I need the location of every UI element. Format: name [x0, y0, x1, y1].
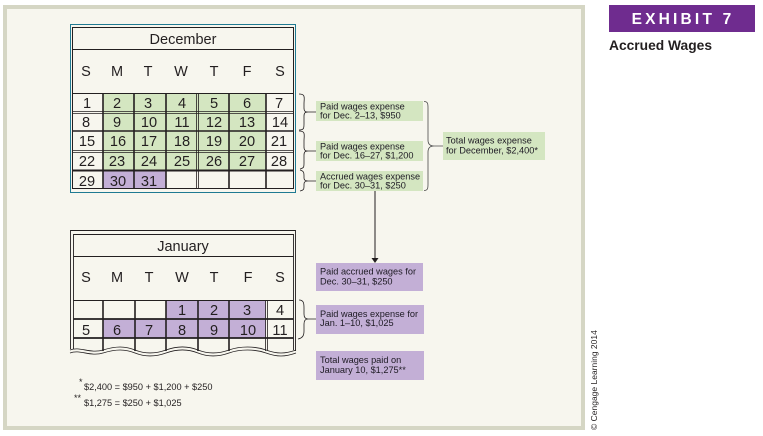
December dates: 7 — [275, 96, 283, 112]
December weekdays: S — [275, 64, 285, 80]
label: paid wages Jan 1-10 — [316, 305, 424, 334]
December dates: 10 — [141, 115, 157, 131]
December dates: 4 — [178, 96, 186, 112]
December dates: 16 — [110, 134, 126, 150]
December weekdays: S — [81, 64, 91, 80]
December title: December — [150, 32, 217, 48]
January dates: 10 — [240, 323, 256, 339]
December weekdays: W — [174, 64, 188, 80]
footnotes: $1,275 = $250 + $1,025 — [84, 398, 182, 408]
January dates: 7 — [145, 323, 153, 339]
exhibit banner: EXHIBIT 7 — [632, 11, 734, 28]
label: paid wages Dec 2-13: for Dec. 2–13, $950 — [320, 110, 401, 120]
January dates: 3 — [243, 303, 251, 319]
December dates — [79, 96, 288, 190]
December dates: 2 — [113, 96, 121, 112]
January highlighted days — [103, 300, 266, 338]
label: total wages paid: Total wages paid on — [320, 355, 401, 365]
December dates: 26 — [206, 154, 222, 170]
January weekdays — [81, 270, 285, 286]
arrow — [372, 191, 378, 263]
December weekdays: T — [144, 64, 153, 80]
December highlighted days — [103, 93, 266, 189]
label: paid accrued wages: Dec. 30–31, $250 — [320, 276, 393, 286]
December dates: 5 — [210, 96, 218, 112]
December weekdays: M — [111, 64, 123, 80]
label: paid wages Jan 1-10: Jan. 1–10, $1,025 — [320, 318, 394, 328]
January calendar — [70, 230, 296, 356]
label: paid accrued wages — [316, 263, 423, 291]
subtitle: Accrued Wages — [609, 38, 712, 53]
December weekdays: T — [210, 64, 219, 80]
label: total wages paid — [316, 351, 424, 380]
December weekdays — [81, 64, 285, 80]
December grid — [72, 28, 294, 188]
December dates: 20 — [239, 134, 255, 150]
December dates: 19 — [206, 134, 222, 150]
January grid — [70, 230, 296, 356]
December dates: 17 — [141, 134, 157, 150]
copyright: © Cengage Learning 2014 — [589, 330, 599, 430]
December dates: 21 — [271, 134, 287, 150]
December dates: 12 — [206, 115, 222, 131]
December dates: 31 — [141, 174, 157, 190]
January dates: 6 — [113, 323, 121, 339]
January dates: 8 — [178, 323, 186, 339]
footnotes: * — [79, 377, 83, 387]
January weekdays: F — [244, 270, 253, 286]
January dates: 11 — [272, 323, 288, 339]
December dates: 24 — [141, 154, 157, 170]
December dates: 25 — [174, 154, 190, 170]
January weekdays: T — [210, 270, 219, 286]
exhibit banner — [609, 5, 755, 32]
December dates: 28 — [271, 154, 287, 170]
December weekdays: F — [243, 64, 252, 80]
January dates: 1 — [178, 303, 186, 319]
January weekdays: T — [145, 270, 154, 286]
label: paid wages Dec 16-27: Paid wages expense — [320, 142, 405, 152]
label: paid accrued wages: Paid accrued wages for — [320, 266, 416, 276]
December dates: 3 — [144, 96, 152, 112]
label: total wages paid: January 10, $1,275** — [320, 365, 406, 375]
label: paid wages Dec 16-27 — [316, 141, 423, 161]
December dates: 14 — [272, 115, 288, 131]
December dates: 29 — [79, 174, 95, 190]
label: accrued wages Dec 30-31: Accrued wages expense — [320, 172, 420, 182]
December dates: 9 — [113, 115, 121, 131]
December calendar — [70, 24, 296, 192]
January dates: 4 — [276, 303, 284, 319]
December dates: 13 — [239, 115, 255, 131]
January dates — [82, 303, 288, 339]
footnotes — [74, 377, 212, 408]
December dates: 22 — [79, 154, 95, 170]
December dates: 15 — [79, 134, 95, 150]
total brace — [424, 102, 443, 190]
January weekdays: S — [81, 270, 91, 286]
label: total wages expense: Total wages expense — [446, 136, 532, 146]
December dates: 8 — [82, 115, 90, 131]
December dates: 30 — [110, 174, 126, 190]
footnotes: $2,400 = $950 + $1,200 + $250 — [84, 382, 212, 392]
January weekdays: S — [275, 270, 285, 286]
January weekdays: M — [111, 270, 123, 286]
label: paid wages Dec 2-13: Paid wages expense — [320, 102, 405, 112]
December dates: 11 — [174, 115, 190, 131]
January brace — [298, 300, 316, 339]
January dates: 5 — [82, 323, 90, 339]
December dates: 23 — [109, 154, 125, 170]
label: paid wages Dec 2-13 — [316, 101, 423, 121]
December dates: 1 — [83, 96, 91, 112]
January weekdays: W — [175, 270, 189, 286]
January title: January — [157, 239, 210, 255]
label: paid wages Jan 1-10: Paid wages expense for — [320, 309, 418, 319]
label: accrued wages Dec 30-31: for Dec. 30–31, $250 — [320, 180, 406, 190]
label: accrued wages Dec 30-31 — [316, 171, 423, 191]
label: total wages expense — [443, 132, 545, 160]
December dates: 6 — [243, 96, 251, 112]
December braces — [299, 94, 316, 191]
January dates: 9 — [210, 323, 218, 339]
footnotes: ** — [74, 393, 82, 403]
January dates: 2 — [210, 303, 218, 319]
December dates: 18 — [174, 134, 190, 150]
December dates: 27 — [239, 154, 255, 170]
label: paid wages Dec 16-27: for Dec. 16–27, $1,200 — [320, 150, 413, 160]
main panel — [5, 7, 583, 428]
label: total wages expense: for December, $2,400* — [446, 146, 538, 156]
